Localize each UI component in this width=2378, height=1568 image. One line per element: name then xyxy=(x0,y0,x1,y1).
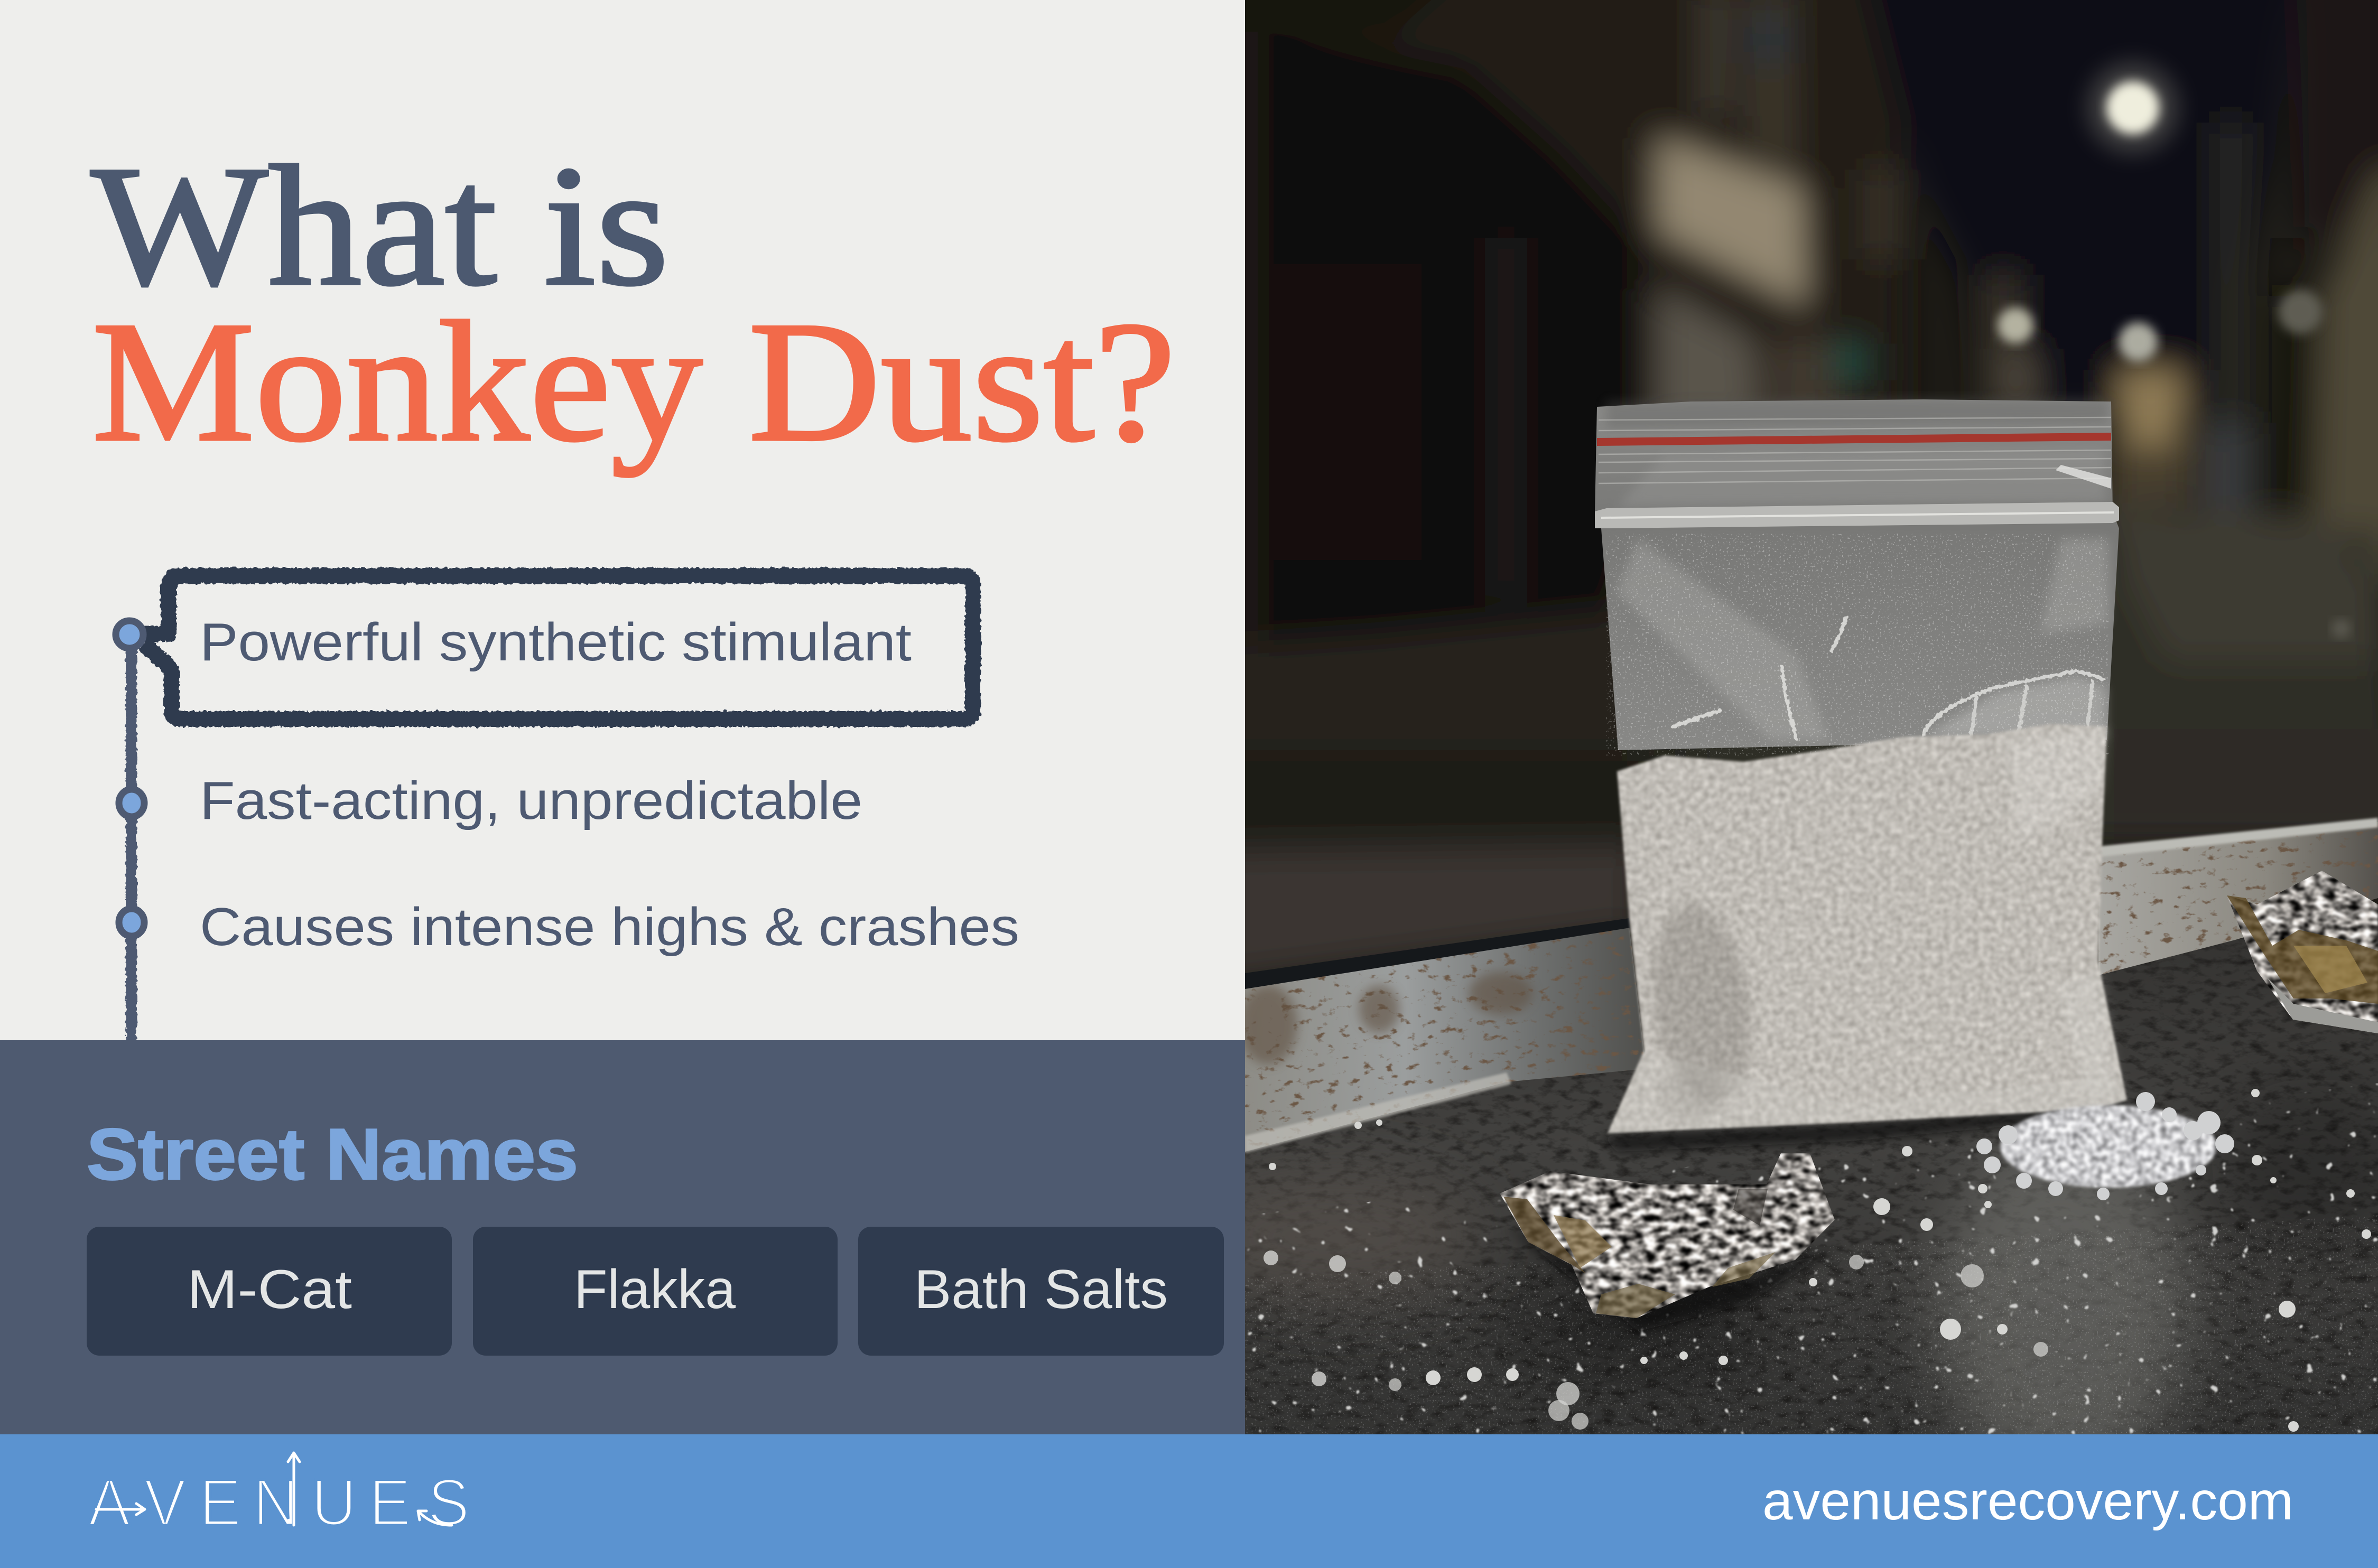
tray floor highlights xyxy=(1184,1078,2378,1485)
zipper band xyxy=(1595,502,2119,528)
left tray rim xyxy=(1245,918,1630,989)
pill: Bath Salts xyxy=(858,1227,1224,1356)
icon: street lights xyxy=(1998,63,2351,638)
panel: background photo of bag on tray xyxy=(1184,0,2378,1485)
title: What is xyxy=(91,130,669,321)
timeline with markers xyxy=(126,576,973,1042)
powder shading xyxy=(1640,898,1763,1110)
heading: Street Names xyxy=(87,1114,578,1195)
tray floor xyxy=(1245,909,2378,1434)
panel: street names xyxy=(0,1040,1245,1434)
footer bar xyxy=(0,1434,2378,1568)
bullet texts xyxy=(200,613,1019,957)
white powder in bag xyxy=(1608,724,2127,1133)
bullet texts: Powerful synthetic stimulant xyxy=(200,613,912,672)
bullet texts: Causes intense highs & crashes xyxy=(200,898,1019,957)
icon: crumpled foil right xyxy=(2227,871,2378,1033)
fine salt dust xyxy=(1245,1215,2378,1434)
bullet marker 1 xyxy=(116,621,143,648)
logo: Avenues: AVENUES xyxy=(88,1466,470,1539)
left tray wall xyxy=(1245,927,1646,1152)
bag highlights xyxy=(1617,539,1828,740)
blurred night street backdrop xyxy=(1215,0,2378,983)
bag contact shadow xyxy=(1601,1104,2130,1152)
pill: M-Cat xyxy=(87,1227,452,1356)
red seal line xyxy=(1597,433,2111,446)
bullet texts: Fast-acting, unpredictable xyxy=(200,771,862,830)
salt specks xyxy=(1245,1083,2378,1434)
zip bag clear upper section xyxy=(1595,397,2119,755)
icon: crumpled foil centre xyxy=(1500,1153,1839,1331)
scattered salt grains xyxy=(1264,1089,2371,1432)
rust patches on left wall xyxy=(1239,972,1532,1065)
website url: avenuesrecovery.com xyxy=(1762,1471,2293,1531)
bag fine lines xyxy=(1599,417,2111,483)
title xyxy=(91,130,1176,477)
callout: highlight box outline xyxy=(143,576,973,719)
white residue streaks xyxy=(1673,618,2103,740)
right tray wall xyxy=(2098,822,2378,975)
left wall lower highlight xyxy=(1245,1072,1511,1153)
title: Monkey Dust? xyxy=(92,286,1176,477)
salt pile xyxy=(1976,1092,2234,1200)
bullet marker 3 xyxy=(119,909,144,936)
pill: Bath Salts: Bath Salts xyxy=(914,1259,1168,1320)
bullet marker 2 xyxy=(119,789,144,817)
pill: M-Cat: M-Cat xyxy=(187,1259,352,1320)
right tray rim xyxy=(2098,818,2378,857)
logo arrows xyxy=(96,1453,452,1525)
pill: Flakka: Flakka xyxy=(574,1259,736,1320)
panel: left text area xyxy=(0,0,1245,1042)
pill: Flakka xyxy=(473,1227,838,1356)
